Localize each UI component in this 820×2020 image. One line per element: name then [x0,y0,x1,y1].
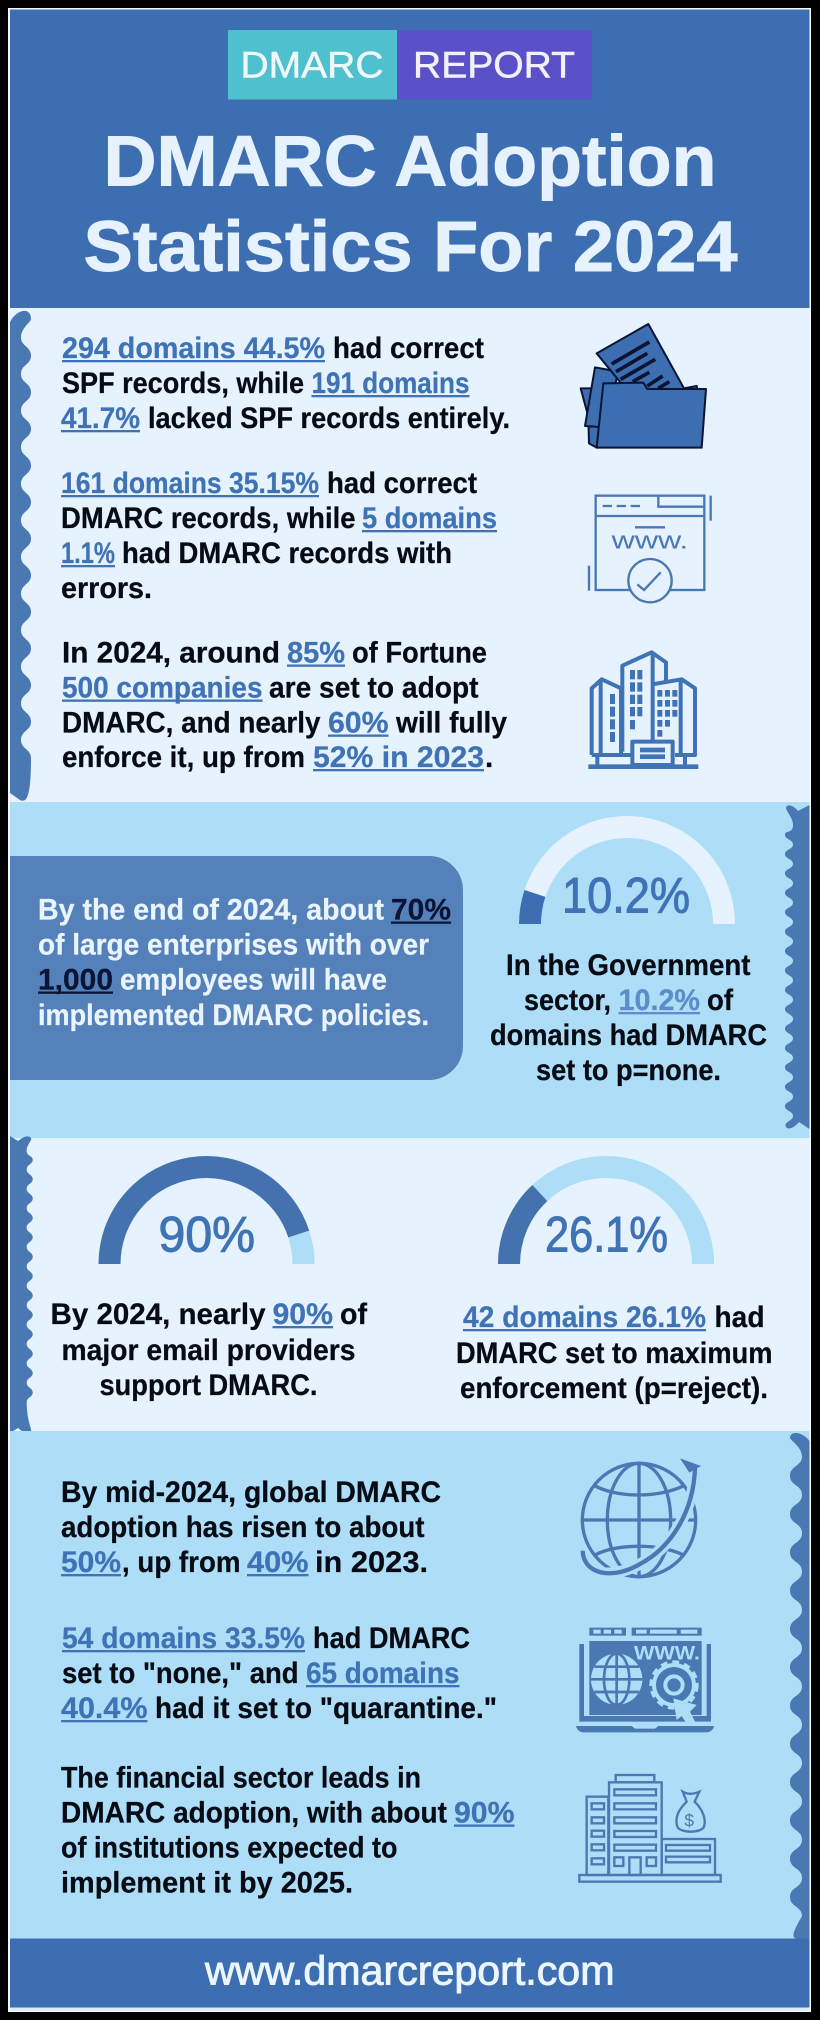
text: none and quarantine: 65 domains [306,1657,460,1690]
text: global adoption: 50% [61,1546,121,1579]
callout: large enterprises [10,856,463,1080]
text: Fortune 500: 500 companies [62,672,262,704]
title: DMARC Adoption [104,122,716,202]
panel: global adoption, policies and financial sector [10,1431,810,1938]
title [84,122,738,287]
text: none and quarantine: had it set to "quarantine." [155,1692,497,1725]
text: major email providers: By 2024, nearly [50,1298,266,1331]
logo: DMARC [240,44,384,86]
text: major email providers: support DMARC. [100,1369,318,1402]
text: major email providers: 90% [272,1298,333,1331]
chart: 26.1% gauge [509,1167,703,1264]
text: Fortune 500: of Fortune [352,636,487,670]
text: Fortune 500: In 2024, around [62,636,280,670]
text: Fortune 500: 60% [328,706,388,740]
panel: large enterprises and government sector [10,802,810,1138]
text: Fortune 500: . [485,741,493,774]
icon: laptop with www, globe and gear [576,1628,714,1732]
text: government sector: sector, [524,984,611,1017]
text: SPF records: had correct [333,332,484,365]
text: none and quarantine: 54 domains 33.5% [62,1622,305,1655]
text: Fortune 500 [62,636,508,774]
text: DMARC records: 5 domains [362,502,497,535]
text: maximum enforcement: had [714,1301,764,1334]
text: SPF records [61,332,510,435]
text: DMARC records: had correct [327,467,477,500]
text: maximum enforcement: enforcement (p=reject). [460,1372,768,1405]
icon: laptop with www, globe and gear: WWW. [634,1643,700,1664]
wavy edge left [10,1136,33,1434]
footer website: www.dmarcreport.com [204,1948,614,1994]
icon: www browser window with check: www. [610,527,688,554]
text: SPF records: 294 domains 44.5% [62,332,325,365]
panel: footer [10,1938,810,2011]
chart: 10.2% gauge [530,827,724,924]
text: Fortune 500: will fully [395,706,508,740]
panel: SPF, DMARC records and Fortune 500 [10,308,810,802]
logo: REPORT [413,44,575,86]
text: government sector [490,949,767,1087]
text: financial sector: DMARC adoption, with about [61,1796,447,1830]
text: none and quarantine: had DMARC [313,1622,470,1655]
callout: large enterprises: 1,000 [38,964,113,996]
chart: 90% gauge: 90% [158,1206,255,1262]
text: maximum enforcement: 42 domains 26.1% [463,1301,706,1334]
logo [228,30,592,100]
wavy edge left [10,311,31,801]
text: maximum enforcement [456,1301,772,1405]
text: financial sector: 90% [454,1796,514,1830]
chart: 10.2% gauge: 10.2% [562,868,690,924]
text: government sector: 10.2% [618,984,700,1017]
chart: 90% gauge [110,1167,304,1264]
text: DMARC records: errors. [61,572,152,605]
text: SPF records: SPF records, while [62,367,304,400]
text: major email providers: of [340,1298,367,1331]
callout: large enterprises: By the end of 2024, about [38,894,384,926]
text: Fortune 500: 85% [287,636,345,670]
text: global adoption: , up from [122,1546,240,1579]
callout: large enterprises: implemented DMARC policies. [38,999,429,1032]
icon: bank building with money bag: $ [684,1811,694,1831]
icon: folder with documents [581,324,706,448]
text: financial sector: The financial sector leads in [61,1762,421,1794]
text: global adoption: adoption has risen to about [61,1511,425,1544]
text: Fortune 500: enforce it, up from [62,741,305,774]
chart: 26.1% gauge: 26.1% [545,1206,668,1262]
text: DMARC records: had DMARC records with [122,537,452,570]
text: DMARC records: DMARC records, while [61,502,356,535]
icon: bank building with money bag [579,1775,721,1882]
text: maximum enforcement: DMARC set to maximum [456,1337,772,1370]
text: none and quarantine: 40.4% [61,1692,148,1725]
text: none and quarantine [61,1622,497,1725]
icon: www browser window with check [589,496,711,602]
text: DMARC records [61,467,497,605]
text: Fortune 500: DMARC, and nearly [62,706,321,740]
text: government sector: of [707,984,733,1017]
callout: large enterprises: employees will have [120,964,387,996]
icon: office towers [588,652,698,767]
wavy edge right [785,805,810,1129]
title: Statistics For 2024 [84,208,738,287]
icon: globe with orbit arrow [582,1458,701,1577]
text: global adoption [61,1476,441,1579]
text: government sector: set to p=none. [536,1054,721,1087]
text: global adoption: By mid-2024, global DMARC [61,1476,441,1509]
text: SPF records: 191 domains [312,367,470,400]
text: global adoption: in 2023. [315,1546,428,1579]
text: government sector: domains had DMARC [490,1019,767,1052]
text: major email providers [50,1298,367,1402]
text: government sector: In the Government [506,949,751,982]
text: SPF records: 41.7% [61,402,140,435]
text: SPF records: lacked SPF records entirely. [148,402,510,435]
panel: email providers and maximum enforcement [10,1136,810,1434]
callout: large enterprises: 70% [391,894,451,926]
text: DMARC records: 161 domains 35.15% [61,467,319,500]
text: Fortune 500: are set to adopt [269,672,479,704]
wavy edge right [790,1433,810,1938]
text: financial sector: implement it by 2025. [61,1866,353,1900]
text: major email providers: major email providers [62,1334,356,1367]
text: global adoption: 40% [247,1546,308,1579]
text: DMARC records: 1.1% [61,537,115,570]
text: Fortune 500: 52% in 2023 [313,741,484,774]
text: none and quarantine: set to "none," and [62,1657,298,1690]
panel: header [10,10,810,308]
text: financial sector [61,1762,514,1900]
callout: large enterprises: of large enterprises with over [38,928,429,962]
text: financial sector: of institutions expected to [61,1832,398,1864]
